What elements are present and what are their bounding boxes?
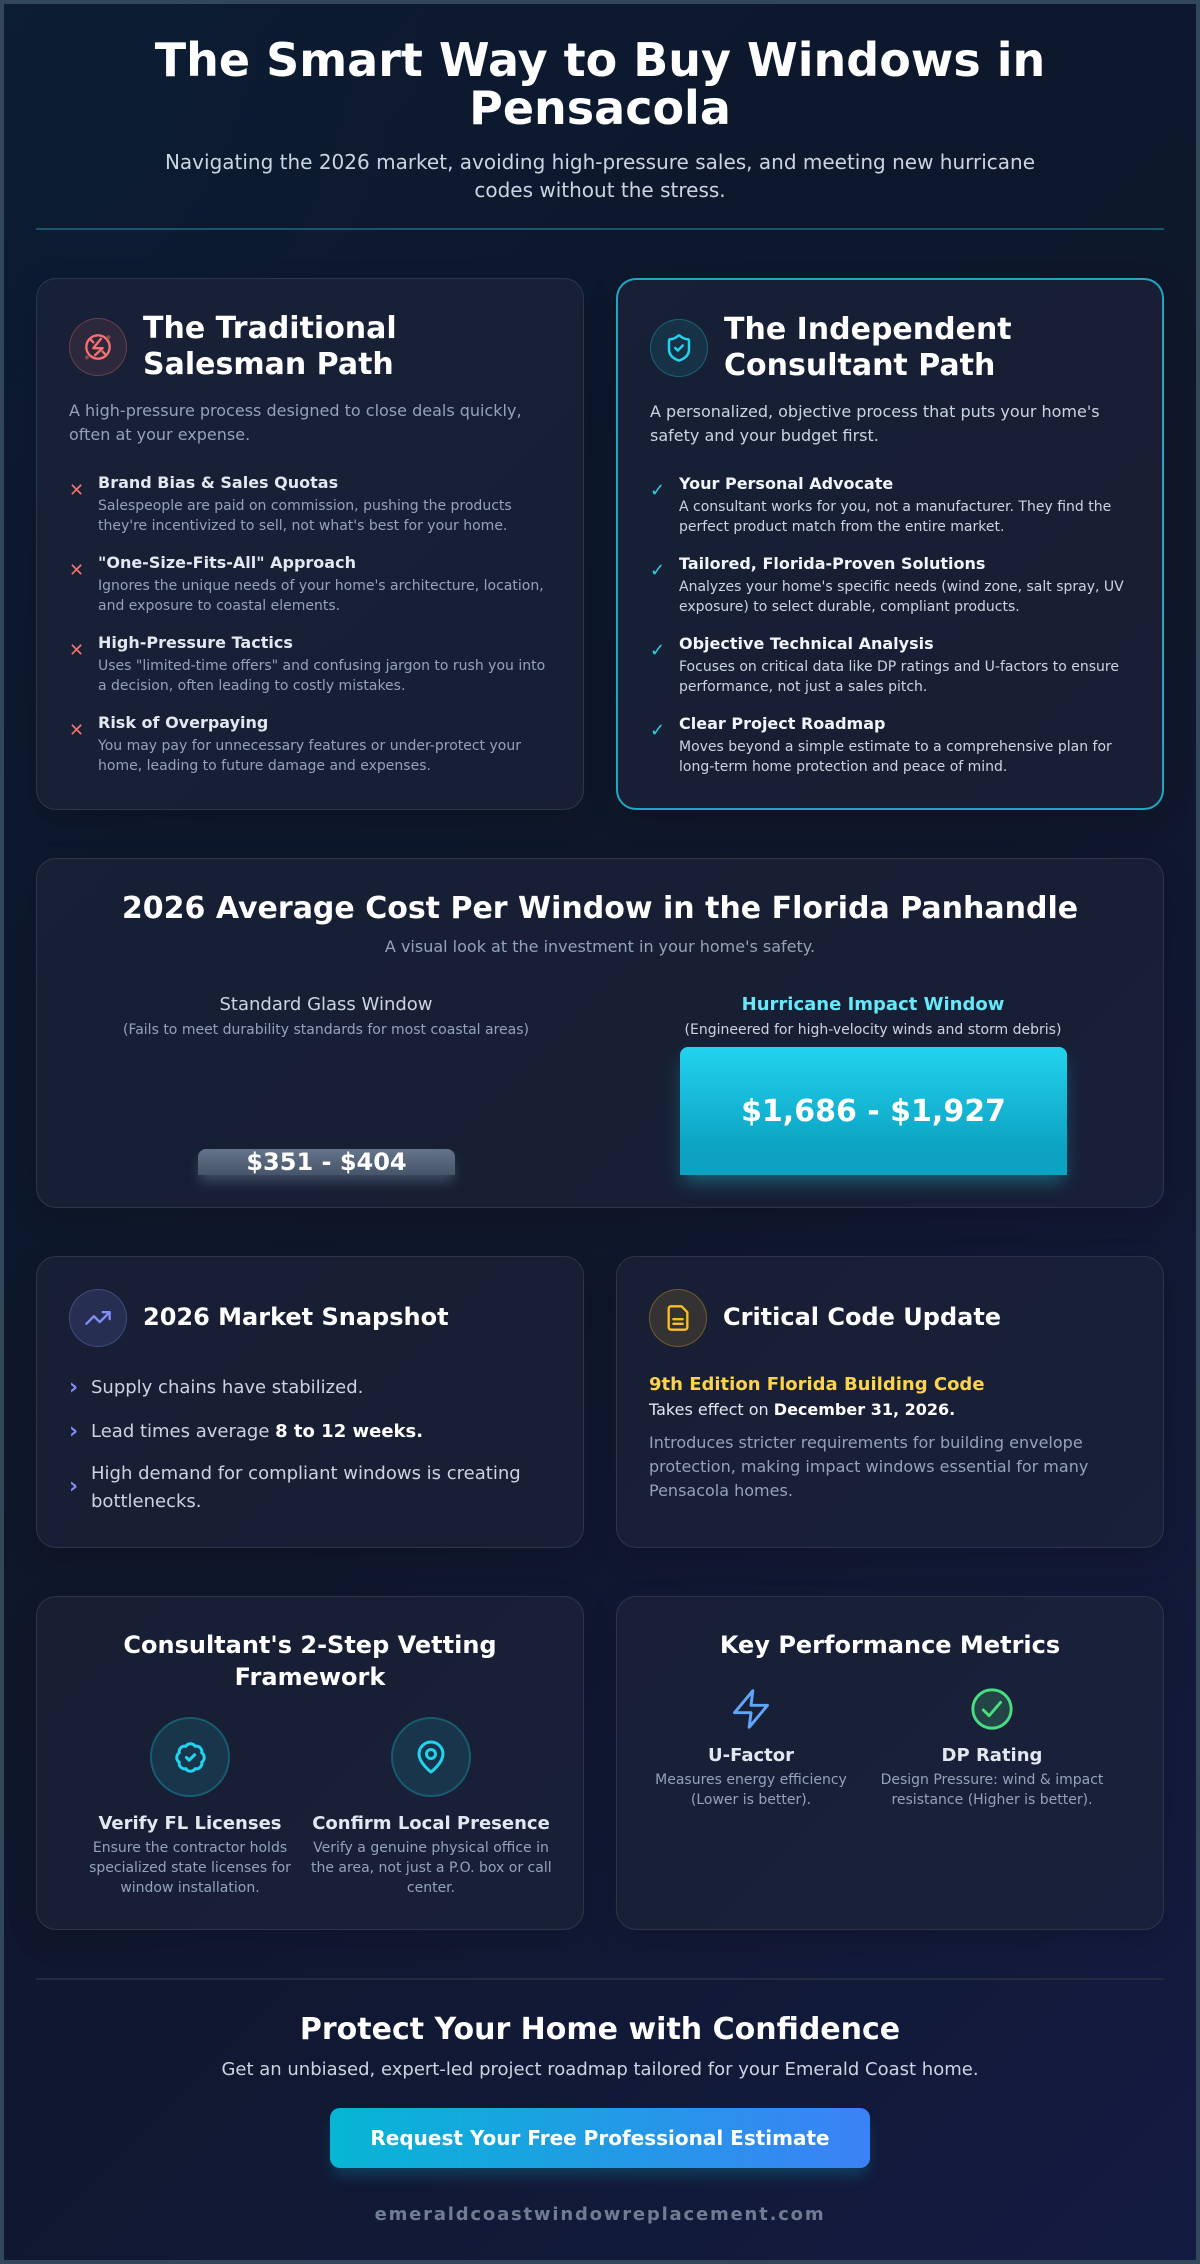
- bullet list: High demand for compliant windows is creating: [91, 1463, 521, 1484]
- item: one size: and exposure to coastal elements.: [98, 598, 340, 614]
- metric: u-factor: [655, 1689, 847, 1808]
- description: A high-pressure process designed to close deals quickly,: [69, 401, 522, 420]
- item: technical: performance, not just a sales pitch.: [679, 679, 927, 695]
- item: brand bias: Salespeople are paid on commission, pushing the products: [98, 498, 512, 514]
- panel: vetting framework: [36, 1596, 584, 1930]
- description: often at your expense.: [69, 425, 250, 444]
- subtitle: codes without the stress.: [474, 178, 726, 202]
- description: safety and your budget first.: [650, 426, 879, 445]
- metric: dp rating: resistance (Higher is better).: [891, 1792, 1093, 1808]
- icon: document: [649, 1289, 707, 1347]
- step: licenses: Ensure the contractor holds: [93, 1840, 287, 1856]
- item: roadmap: Moves beyond a simple estimate to a comprehensive plan for: [679, 739, 1112, 755]
- subtitle: [165, 150, 1035, 202]
- panel: performance metrics: [616, 1596, 1164, 1930]
- step: licenses: Verify FL Licenses: [98, 1813, 282, 1834]
- step: local presence: the area, not just a P.O. box or call: [311, 1860, 552, 1876]
- description: Pensacola homes.: [649, 1481, 793, 1500]
- panel: independent consultant path: [616, 278, 1164, 810]
- bar: standard glass: Standard Glass Window: [219, 994, 433, 1015]
- bullet list: ›: [69, 1474, 78, 1499]
- metric: u-factor: U-Factor: [708, 1745, 794, 1766]
- item: overpaying: You may pay for unnecessary features or under-protect your: [98, 738, 521, 754]
- item: advocate: ✓: [650, 480, 665, 501]
- button: [330, 2108, 870, 2168]
- item: one size: [69, 553, 544, 614]
- bullet list: [69, 1375, 521, 1512]
- title: The Smart Way to Buy Windows in: [155, 33, 1045, 87]
- call to action: [221, 2012, 979, 2225]
- item: overpaying: [69, 713, 521, 774]
- item: tailored: exposure) to select durable, compliant products.: [679, 599, 1020, 615]
- heading: Consultant Path: [724, 348, 995, 383]
- icon: shield check: [650, 319, 708, 377]
- bar: standard glass: (Fails to meet durability standards for most coastal areas): [123, 1022, 529, 1038]
- bullet list: ›: [69, 1375, 78, 1400]
- item: advocate: [650, 474, 1111, 535]
- item: brand bias: ✕: [69, 480, 84, 501]
- item: high pressure: a decision, often leading to costly mistakes.: [98, 678, 405, 694]
- item: brand bias: [69, 473, 512, 534]
- description: [649, 1433, 1088, 1500]
- heading: Consultant's 2-Step Vetting: [123, 1631, 497, 1659]
- item: overpaying: ✕: [69, 720, 84, 741]
- panel: traditional salesman path: [36, 278, 584, 810]
- metric: dp rating: Design Pressure: wind & impact: [881, 1772, 1103, 1788]
- step: local presence: [311, 1717, 552, 1896]
- step: licenses: [89, 1717, 291, 1896]
- item: tailored: [650, 554, 1124, 615]
- item: advocate: perfect product match from the entire market.: [679, 519, 1004, 535]
- item: roadmap: Clear Project Roadmap: [679, 714, 885, 733]
- heading: The Traditional: [143, 311, 397, 346]
- description: protection, making impact windows essential for many: [649, 1457, 1088, 1476]
- item: high pressure: High-Pressure Tactics: [98, 633, 293, 652]
- header: [154, 33, 1045, 202]
- heading: Key Performance Metrics: [720, 1631, 1060, 1659]
- item: overpaying: home, leading to future damage and expenses.: [98, 758, 431, 774]
- item: overpaying: Risk of Overpaying: [98, 713, 268, 732]
- effective date: Takes effect on December 31, 2026.: [649, 1400, 955, 1419]
- icon: badge check: [150, 1717, 230, 1797]
- item: high pressure: ✕: [69, 640, 84, 661]
- metric: dp rating: DP Rating: [942, 1745, 1042, 1766]
- bullet list: bottlenecks.: [91, 1491, 202, 1512]
- item: roadmap: ✓: [650, 720, 665, 741]
- item: tailored: Tailored, Florida-Proven Solutions: [679, 554, 985, 573]
- cta text: Get an unbiased, expert-led project roadmap tailored for your Emerald Coast home.: [221, 2059, 979, 2080]
- icon: check circle: [971, 1688, 1013, 1730]
- title: Pensacola: [469, 81, 731, 135]
- subheading: A visual look at the investment in your home's safety.: [385, 937, 815, 956]
- heading: 2026 Average Cost Per Window in the Florida Panhandle: [122, 891, 1078, 926]
- heading: Critical Code Update: [723, 1303, 1001, 1331]
- metric: u-factor: Measures energy efficiency: [655, 1772, 847, 1788]
- item: tailored: ✓: [650, 560, 665, 581]
- heading: The Independent: [724, 312, 1012, 347]
- heading: [123, 1631, 497, 1691]
- code name: 9th Edition Florida Building Code: [649, 1374, 985, 1395]
- title: [154, 33, 1045, 135]
- bar: hurricane impact: $1,686 - $1,927: [741, 1094, 1006, 1129]
- item: roadmap: long-term home protection and peace of mind.: [679, 759, 1007, 775]
- item: technical: [650, 634, 1119, 695]
- item: one size: Ignores the unique needs of your home's architecture, location,: [98, 578, 544, 594]
- step: local presence: center.: [407, 1880, 455, 1896]
- step: local presence: Verify a genuine physical office in: [313, 1840, 549, 1856]
- subtitle: Navigating the 2026 market, avoiding high-pressure sales, and meeting new hurricane: [165, 150, 1035, 174]
- button: Request Your Free Professional Estimate: [370, 2126, 830, 2150]
- bar: hurricane impact: Hurricane Impact Window: [742, 994, 1004, 1015]
- cta heading: Protect Your Home with Confidence: [300, 2012, 900, 2047]
- heading: [724, 312, 1012, 383]
- bullet list: ›: [69, 1419, 78, 1444]
- icon: red bolt: [69, 318, 127, 376]
- heading: [143, 311, 397, 382]
- step: local presence: Confirm Local Presence: [312, 1813, 550, 1834]
- metric: u-factor: (Lower is better).: [691, 1792, 811, 1808]
- step: licenses: specialized state licenses for: [89, 1860, 291, 1876]
- item: high pressure: Uses "limited-time offers" and confusing jargon to rush you into: [98, 658, 545, 674]
- panel: cost chart: [36, 858, 1164, 1208]
- icon: trending up: [69, 1289, 127, 1347]
- item: technical: Objective Technical Analysis: [679, 634, 934, 653]
- icon: map pin: [391, 1717, 471, 1797]
- description: Introduces stricter requirements for building envelope: [649, 1433, 1083, 1452]
- heading: 2026 Market Snapshot: [143, 1303, 449, 1331]
- item: tailored: Analyzes your home's specific needs (wind zone, salt spray, UV: [679, 579, 1124, 595]
- item: roadmap: [650, 714, 1112, 775]
- item: one size: ✕: [69, 560, 84, 581]
- item: advocate: Your Personal Advocate: [679, 474, 893, 493]
- bar: hurricane impact: [674, 994, 1074, 1192]
- metric: dp rating: [881, 1688, 1104, 1808]
- heading: Salesman Path: [143, 347, 394, 382]
- item: brand bias: Brand Bias & Sales Quotas: [98, 473, 338, 492]
- panel: market snapshot: [36, 1256, 584, 1548]
- item: one size: "One-Size-Fits-All" Approach: [98, 553, 356, 572]
- bullet list: Lead times average 8 to 12 weeks.: [91, 1421, 423, 1442]
- heading: Framework: [235, 1663, 385, 1691]
- bar: standard glass: [123, 994, 529, 1186]
- bar: standard glass: $351 - $404: [246, 1148, 407, 1176]
- description: [69, 401, 522, 444]
- bullet list: Supply chains have stabilized.: [91, 1377, 363, 1398]
- item: technical: ✓: [650, 640, 665, 661]
- item: high pressure: [69, 633, 545, 694]
- item: advocate: A consultant works for you, not a manufacturer. They find the: [679, 499, 1111, 515]
- description: [650, 402, 1100, 445]
- description: A personalized, objective process that puts your home's: [650, 402, 1100, 421]
- step: licenses: window installation.: [120, 1880, 260, 1896]
- item: technical: Focuses on critical data like DP ratings and U-factors to ensure: [679, 659, 1119, 675]
- panel: critical code update: [616, 1256, 1164, 1548]
- bar: hurricane impact: (Engineered for high-velocity winds and storm debris): [685, 1022, 1061, 1038]
- website: emeraldcoastwindowreplacement.com: [375, 2204, 825, 2225]
- item: brand bias: they're incentivized to sell, not what's best for your home.: [98, 518, 507, 534]
- icon: bolt: [733, 1689, 769, 1729]
